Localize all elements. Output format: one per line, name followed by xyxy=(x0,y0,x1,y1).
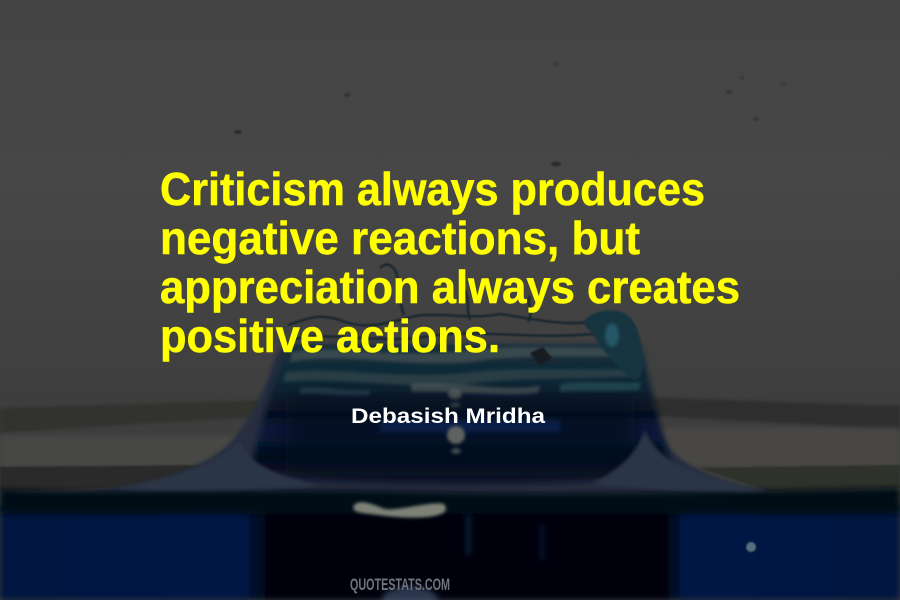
quote text: negative reactions, but xyxy=(160,212,640,264)
water body xyxy=(0,505,900,600)
water surface shadow xyxy=(0,488,900,514)
droplet reflection xyxy=(353,502,446,518)
quote text: Criticism always produces xyxy=(160,163,705,215)
splash top outlines xyxy=(288,265,610,340)
quote text xyxy=(160,163,740,362)
watermark: QUOTESTATS.COM xyxy=(350,575,450,594)
underwater light streaks xyxy=(382,515,544,600)
specks in the sky xyxy=(234,62,786,166)
right lump of the crown xyxy=(584,310,643,380)
pale flare highlight xyxy=(115,440,320,490)
crown streaks xyxy=(283,346,640,396)
quote text: positive actions. xyxy=(160,310,500,362)
quote text: appreciation always creates xyxy=(160,261,740,313)
central stem highlights xyxy=(447,389,465,454)
author name: Debasish Mridha xyxy=(351,405,545,428)
water crown splash xyxy=(60,265,790,515)
underwater bubble xyxy=(746,542,756,552)
dark column interior xyxy=(285,400,635,475)
